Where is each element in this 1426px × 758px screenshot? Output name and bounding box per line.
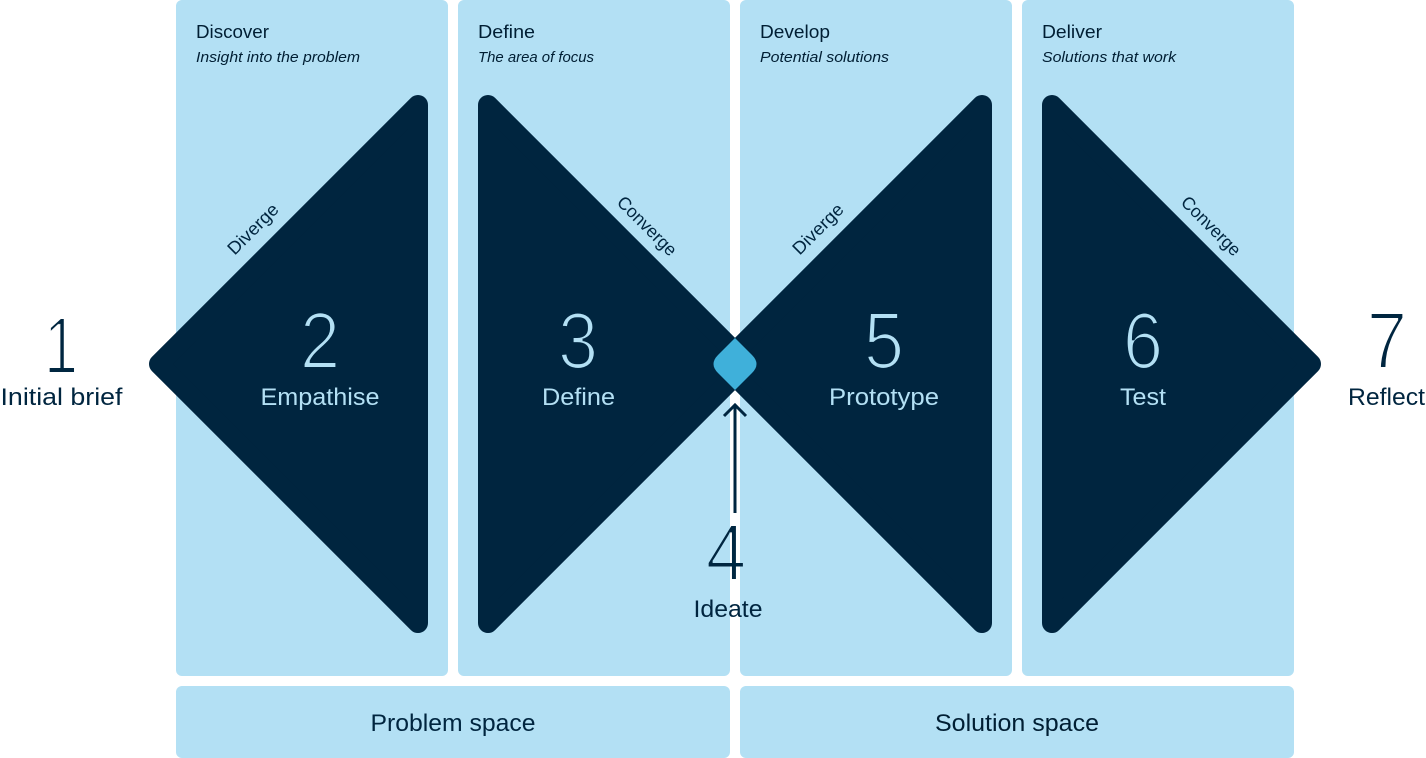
step 1: initial brief bbox=[0, 301, 123, 411]
heading: develop: Develop bbox=[760, 22, 830, 42]
triangle: define converge bbox=[488, 105, 747, 623]
panel: define bbox=[458, 0, 730, 676]
triangle: prototype diverge bbox=[723, 105, 982, 623]
heading: discover: Discover bbox=[196, 22, 269, 42]
label: diverge 2: Diverge bbox=[788, 199, 848, 259]
step 7: reflect: Reflect bbox=[1348, 384, 1425, 411]
panel: problem space: Problem space bbox=[370, 710, 536, 737]
step 3: define bbox=[542, 296, 615, 411]
triangle: test converge bbox=[1052, 105, 1311, 623]
diamond: ideate marker bbox=[714, 338, 756, 390]
step 4: ideate: Ideate bbox=[694, 596, 762, 623]
step 3: define: 3 bbox=[558, 296, 598, 385]
step 1: initial brief: 1 bbox=[44, 301, 78, 390]
step 7: reflect bbox=[1348, 296, 1425, 411]
panel: discover bbox=[176, 0, 448, 676]
step 6: test: Test bbox=[1120, 384, 1166, 411]
heading: define: Define bbox=[478, 22, 535, 42]
step 7: reflect: 7 bbox=[1367, 296, 1407, 385]
step 3: define: Define bbox=[542, 384, 615, 411]
step 2: empathise bbox=[260, 296, 380, 411]
step 1: initial brief: Initial brief bbox=[0, 384, 123, 411]
panel: solution space bbox=[740, 686, 1294, 758]
text: insight into the problem: Insight into the problem bbox=[196, 49, 360, 66]
step 4: ideate bbox=[694, 508, 762, 623]
triangle: empathise diverge bbox=[159, 105, 418, 623]
step 2: empathise: Empathise bbox=[260, 384, 380, 411]
step 5: prototype bbox=[829, 296, 939, 411]
step 5: prototype: Prototype bbox=[829, 384, 939, 411]
panel: develop bbox=[740, 0, 1012, 676]
text: solutions that work: Solutions that work bbox=[1042, 49, 1178, 66]
panel: deliver bbox=[1022, 0, 1294, 676]
panel: problem space bbox=[176, 686, 730, 758]
heading: deliver: Deliver bbox=[1042, 22, 1102, 42]
step 4: ideate: 4 bbox=[706, 508, 746, 597]
panel: solution space: Solution space bbox=[935, 710, 1099, 737]
text: the area of focus: The area of focus bbox=[478, 49, 594, 66]
label: converge 2: Converge bbox=[1177, 192, 1245, 260]
step 2: empathise: 2 bbox=[300, 296, 340, 385]
arrow: ideate to diamond bbox=[724, 405, 746, 513]
text: potential solutions: Potential solutions bbox=[760, 49, 890, 66]
label: diverge 1: Diverge bbox=[223, 199, 283, 259]
step 5: prototype: 5 bbox=[864, 296, 904, 385]
step 6: test: 6 bbox=[1123, 296, 1163, 385]
label: converge 1: Converge bbox=[613, 192, 681, 260]
